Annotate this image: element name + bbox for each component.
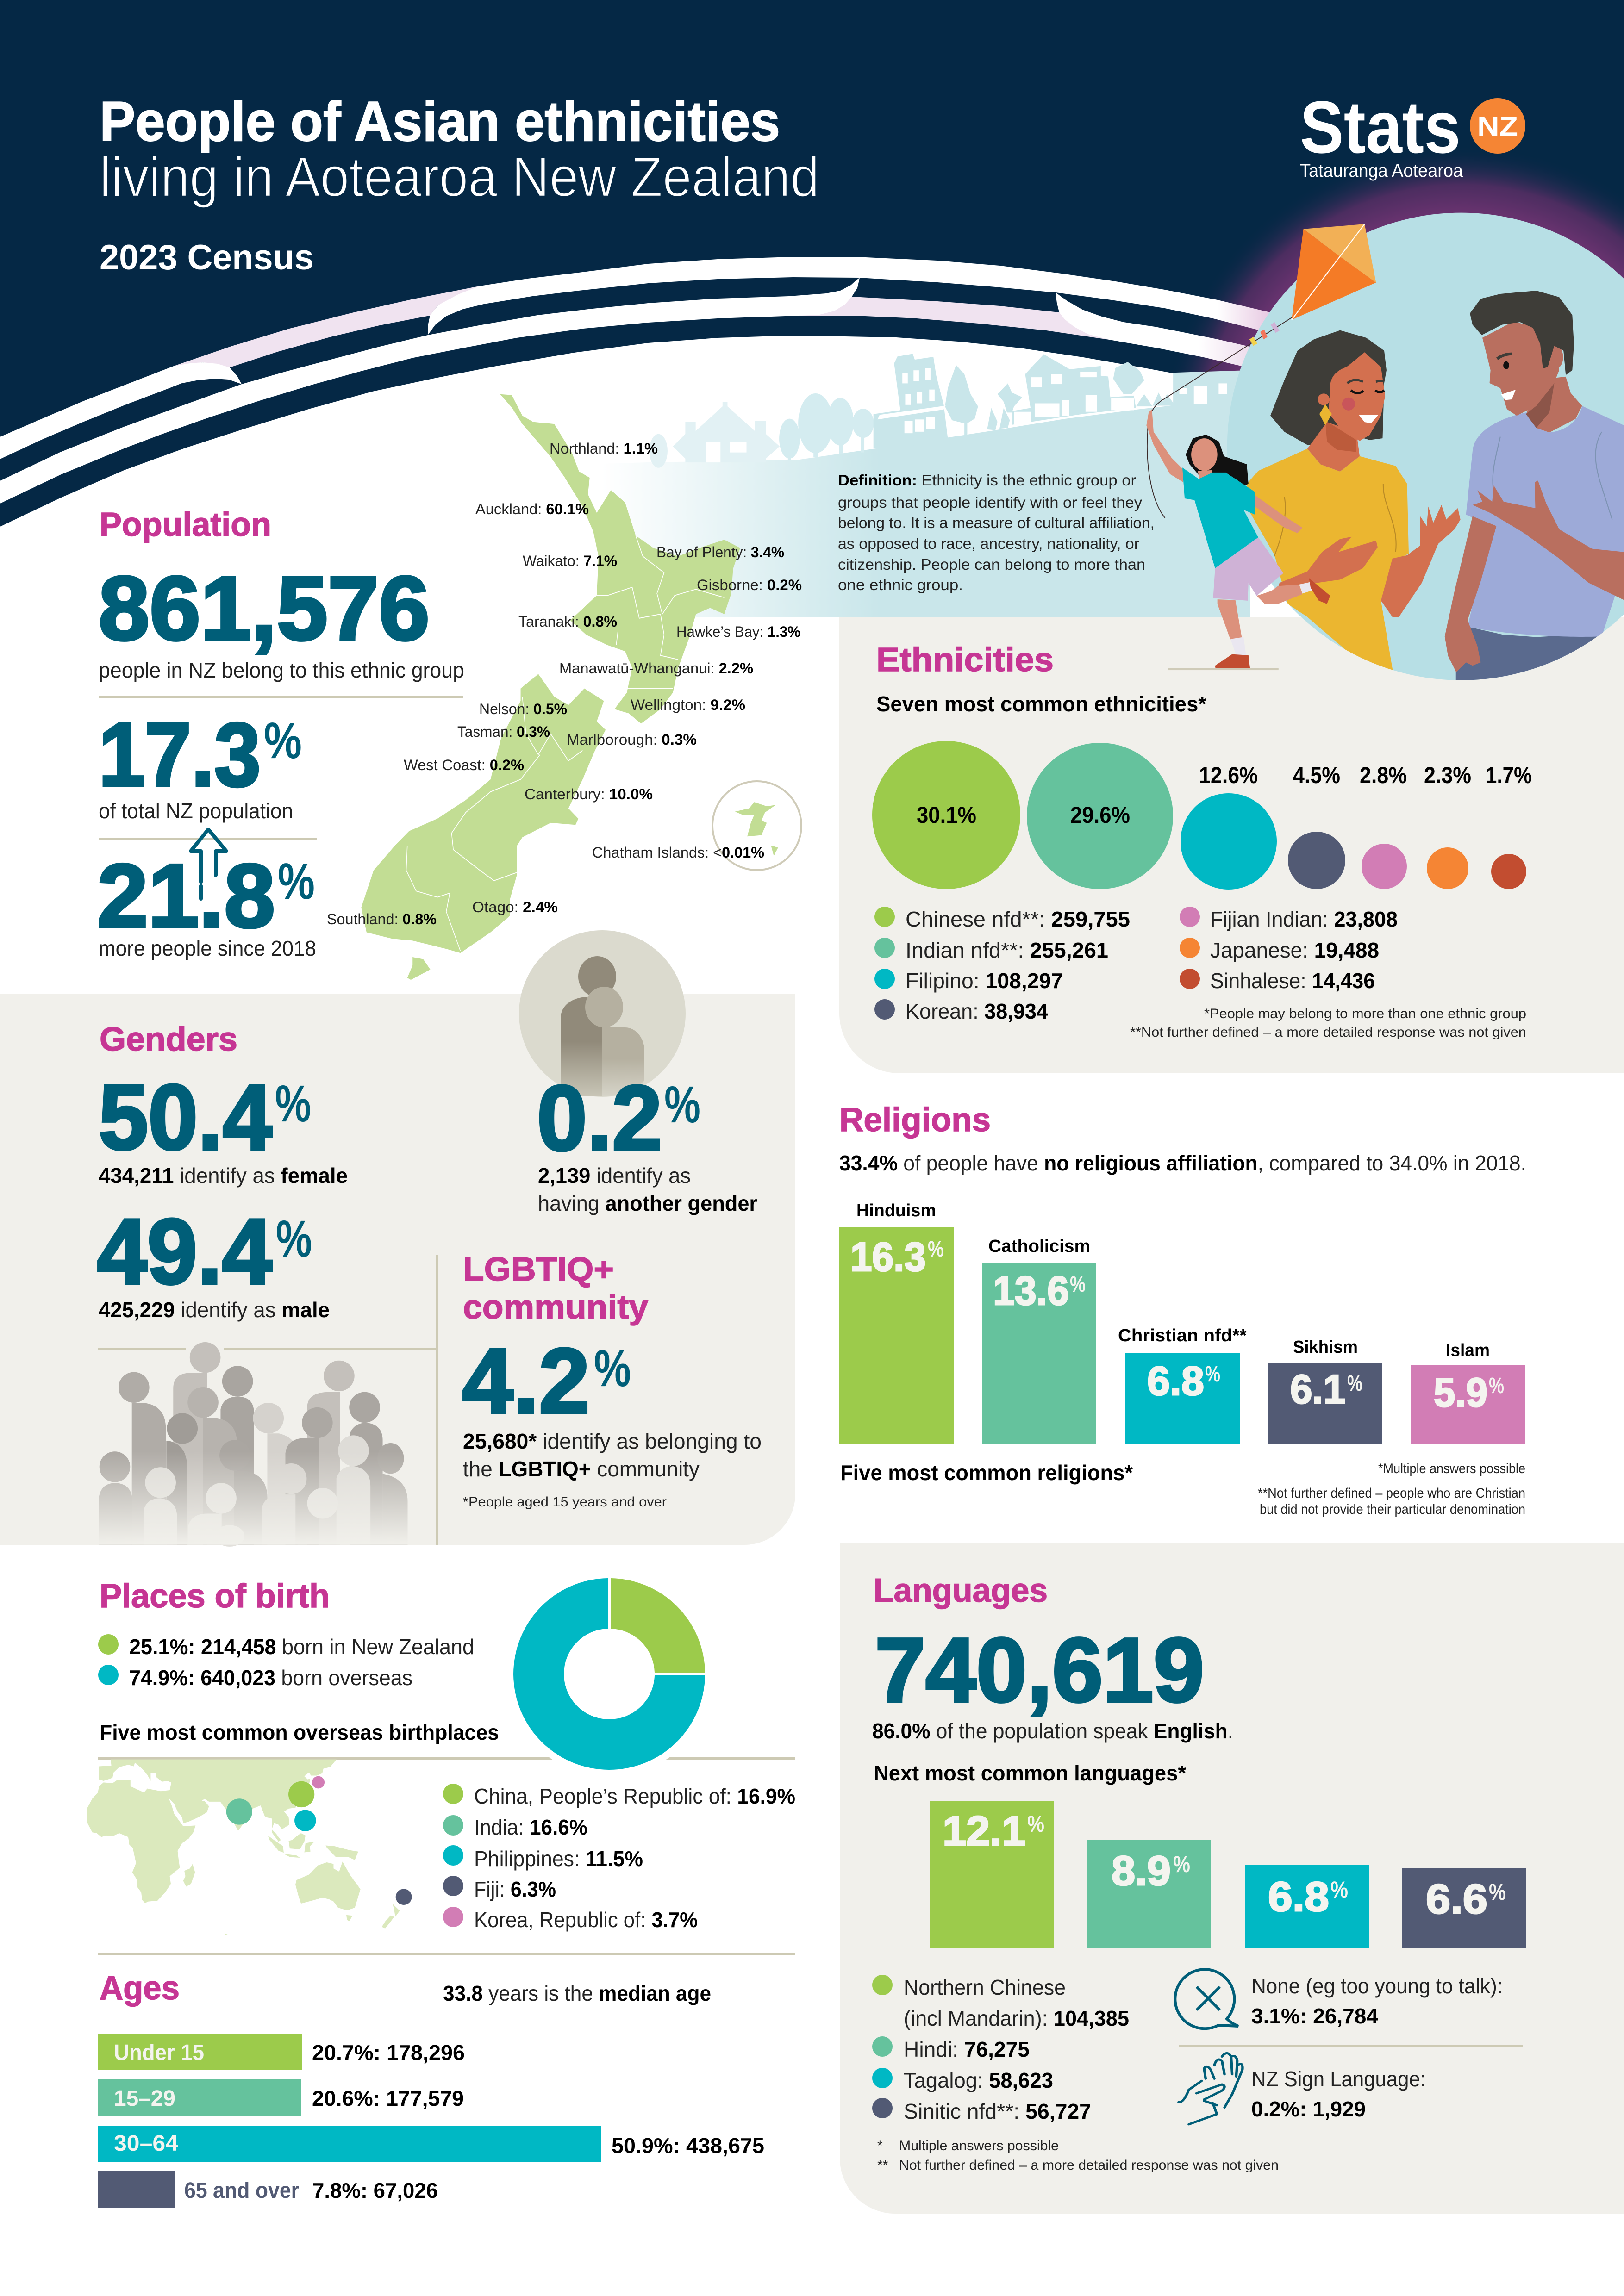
born in NZ vs overseas legend: 25.1%: 214,458 born in New Zealand <box>129 1635 474 1659</box>
bar: 15-29: 15–29 <box>114 2086 175 2111</box>
subheading: overseas birthplaces: Five most common overseas birthplaces <box>100 1720 499 1744</box>
bubble chart: 30.1% <box>917 802 976 828</box>
map of New Zealand with regional percentages: Bay of Plenty: 3.4% <box>656 544 784 560</box>
birthplaces legend: Fiji: 6.3% <box>474 1877 556 1901</box>
bar: hindi <box>1087 1840 1211 1948</box>
religions footnotes <box>1258 1461 1525 1517</box>
definition text: as opposed to race, ancestry, nationality, or <box>838 535 1139 552</box>
bar: christian nfd: % <box>1205 1362 1220 1387</box>
no religious affiliation text: 33.4% of people have no religious affiliation, compared to 34.0% in 2018. <box>839 1151 1526 1175</box>
bar: catholicism <box>982 1237 1096 1444</box>
map of New Zealand with regional percentages: Manawatū-Whanganui: 2.2% <box>559 660 753 677</box>
religions footnotes: *Multiple answers possible <box>1378 1461 1525 1476</box>
bar: christian nfd: 6.8 <box>1147 1358 1204 1404</box>
stat: 17.3%: % <box>264 712 302 769</box>
panel: ethnicities background <box>839 617 1624 1073</box>
no language text <box>1251 1974 1503 2028</box>
no language text: 3.1%: 26,784 <box>1251 2004 1378 2028</box>
stat: 49.4% male <box>97 1200 330 1322</box>
stat: 49.4% male: % <box>276 1210 312 1268</box>
heading: LGBTIQ+: LGBTIQ+ <box>463 1251 614 1288</box>
map of New Zealand with regional percentages: West Coast: 0.2% <box>404 757 524 773</box>
english speakers caption: 86.0% of the population speak English. <box>872 1719 1233 1743</box>
bubble chart: 29.6% <box>1070 802 1130 828</box>
ethnicities legend: Japanese: 19,488 <box>1210 938 1379 962</box>
median age: 33.8 years is the median age <box>443 1981 711 2005</box>
NZ sign language text: 0.2%: 1,929 <box>1251 2097 1366 2121</box>
bar: under 15 <box>98 2034 465 2070</box>
icon: two people in circle <box>519 930 686 1097</box>
Chatham Islands circle <box>712 781 801 870</box>
bar: sikhism: % <box>1347 1371 1362 1396</box>
bar: christian nfd <box>1118 1326 1247 1444</box>
ethnicities legend: Sinhalese: 14,436 <box>1210 969 1375 993</box>
definition text: groups that people identify with or feel they <box>838 494 1143 511</box>
stat: 50.4% female: 50.4 <box>99 1066 272 1169</box>
title: People of Asian ethnicities <box>100 90 780 153</box>
languages legend: (incl Mandarin): 104,385 <box>904 2006 1129 2030</box>
stat: 21.8%: % <box>278 853 315 910</box>
NZ sign language text: NZ Sign Language: <box>1251 2067 1426 2091</box>
bar: tagalog: 6.8 <box>1268 1874 1329 1920</box>
languages legend: Northern Chinese <box>904 1975 1066 1999</box>
panel: ages <box>98 1970 764 2208</box>
bar: tagalog <box>1245 1865 1369 1948</box>
bubble chart: 4.5% <box>1293 762 1340 788</box>
stat: 49.4% male: 425,229 identify as male <box>99 1298 330 1322</box>
ethnicities footnotes <box>1130 1006 1526 1040</box>
panel: LGBTIQ+ community <box>462 1251 762 1510</box>
bubble chart: 12.6% <box>1199 762 1258 788</box>
panel: population <box>97 506 464 960</box>
stat: 0.2% another gender: having another gender <box>538 1191 757 1215</box>
bar: islam: Islam <box>1446 1341 1490 1360</box>
bar: 15-29 <box>98 2079 464 2116</box>
icon: speech bubble with cross <box>1175 1969 1238 2028</box>
definition text: belong to. It is a measure of cultural affiliation, <box>838 514 1155 531</box>
stat: 4.2%: 4.2 <box>462 1330 590 1433</box>
bar: under 15: Under 15 <box>114 2041 204 2065</box>
heading: religions: Religions <box>839 1101 991 1139</box>
map of New Zealand with regional percentages: Tasman: 0.3% <box>457 723 550 740</box>
stat: 49.4% male: 49.4 <box>97 1200 272 1303</box>
caption: of total NZ population: of total NZ population <box>99 799 293 823</box>
NZ sign language text <box>1251 2067 1426 2121</box>
bubble chart: 1.7% <box>1486 762 1532 788</box>
stat: 4.2%: % <box>594 1339 631 1397</box>
bar: islam: 5.9 <box>1434 1369 1487 1415</box>
stat: 740,619: 740,619 <box>875 1619 1204 1721</box>
header background <box>0 0 1624 527</box>
bubble chart <box>872 741 1532 890</box>
map of New Zealand with regional percentages: Northland: 1.1% <box>550 440 658 457</box>
backdrop circle <box>1227 213 1624 680</box>
definition text <box>838 472 1155 593</box>
religions footnotes: but did not provide their particular denomination <box>1260 1502 1525 1517</box>
stat: 17.3%: 17.3 <box>99 704 261 805</box>
birthplaces legend: China, People’s Republic of: 16.9% <box>474 1784 795 1808</box>
logo: Stats NZ <box>1300 86 1525 181</box>
bar: northern chinese <box>930 1801 1054 1948</box>
birthplaces legend: Philippines: 11.5% <box>474 1847 643 1871</box>
bar: sikhism: 6.1 <box>1290 1366 1345 1412</box>
panel: languages <box>840 1543 1624 2214</box>
ethnicities legend: Indian nfd**: 255,261 <box>906 938 1108 962</box>
bar: catholicism: % <box>1070 1272 1086 1297</box>
stat: 50.4% female: % <box>275 1075 311 1132</box>
LGBTIQ+ caption: *People aged 15 years and over <box>463 1494 667 1510</box>
religions footnotes: **Not further defined – people who are Christian <box>1258 1486 1525 1501</box>
world map with birthplace markers <box>87 1760 412 1935</box>
bar: 15-29: 20.6%: 177,579 <box>312 2086 464 2110</box>
bar: hindi: % <box>1173 1851 1190 1877</box>
map of New Zealand with regional percentages: Otago: 2.4% <box>472 899 558 915</box>
map of New Zealand with regional percentages: Chatham Islands: <0.01% <box>592 844 764 861</box>
bar: sinitic: % <box>1489 1879 1506 1905</box>
heading: genders: Genders <box>100 1021 237 1058</box>
map of New Zealand with regional percentages: Southland: 0.8% <box>327 911 437 927</box>
title: living in Aotearoa New Zealand <box>100 145 819 208</box>
panel: religions <box>839 1101 1526 1517</box>
languages footnotes: Multiple answers possible <box>899 2138 1059 2153</box>
people crowd icon <box>96 1342 414 1547</box>
born in NZ vs overseas legend <box>98 1634 474 1690</box>
bar: christian nfd: Christian nfd** <box>1118 1326 1247 1345</box>
definition text: citizenship. People can belong to more than <box>838 556 1145 573</box>
map of New Zealand with regional percentages: Waikato: 7.1% <box>523 553 617 569</box>
heading: places of birth: Places of birth <box>100 1578 330 1615</box>
bar: 65 and over: 7.8%: 67,026 <box>312 2178 438 2203</box>
stat: 0.2% another gender: % <box>664 1076 700 1133</box>
panel: places of birth <box>87 1571 795 1955</box>
ethnicities legend: Fijian Indian: 23,808 <box>1210 907 1398 931</box>
bar: sinitic: 6.6 <box>1426 1876 1487 1923</box>
languages footnotes <box>877 2138 1279 2173</box>
bar: tagalog: % <box>1330 1877 1348 1903</box>
heading: ages: Ages <box>100 1970 180 2007</box>
languages legend: Hindi: 76,275 <box>904 2037 1030 2061</box>
stat: 0.2% another gender: 0.2 <box>537 1067 662 1170</box>
bar: northern chinese: % <box>1027 1811 1044 1837</box>
languages footnotes: * <box>877 2138 883 2153</box>
definition text: one ethnic group. <box>838 576 963 593</box>
bar: hinduism: Hinduism <box>856 1201 936 1220</box>
heading: population: Population <box>100 506 271 543</box>
subheading: seven most common: Seven most common ethnicities* <box>876 692 1206 716</box>
map of New Zealand with regional percentages: Canterbury: 10.0% <box>525 786 653 803</box>
bar: hinduism: 16.3 <box>850 1234 926 1280</box>
bar: 30-64: 30–64 <box>114 2131 178 2156</box>
bar: sikhism <box>1268 1338 1382 1444</box>
donut chart <box>506 1571 712 1777</box>
languages legend <box>872 1975 1129 2123</box>
heading: languages: Languages <box>874 1572 1048 1609</box>
stat: 861,576: 861,576 <box>99 558 430 659</box>
subheading: next most common languages: Next most common languages* <box>874 1761 1186 1785</box>
logo: Stats NZ: Stats <box>1300 86 1461 168</box>
bubble chart: 2.3% <box>1424 762 1471 788</box>
LGBTIQ+ caption <box>463 1429 762 1510</box>
ethnicities legend: Filipino: 108,297 <box>906 969 1063 993</box>
languages legend: Tagalog: 58,623 <box>904 2068 1053 2092</box>
bar: northern chinese: 12.1 <box>943 1808 1025 1854</box>
heading: community: community <box>463 1289 648 1326</box>
heading: ethnicities: Ethnicities <box>876 641 1054 678</box>
bubble chart: 2.8% <box>1360 762 1407 788</box>
bar: islam <box>1411 1341 1525 1444</box>
panel: ethnicities content <box>872 641 1532 1040</box>
definition text: Definition: Ethnicity is the ethnic group or <box>838 472 1136 489</box>
no language text: None (eg too young to talk): <box>1251 1974 1503 1998</box>
map of New Zealand with regional percentages: Gisborne: 0.2% <box>697 577 802 593</box>
bar: hinduism: % <box>928 1237 944 1262</box>
girl <box>1142 409 1330 670</box>
ethnicities footnotes: *People may belong to more than one ethnic group <box>1204 1006 1526 1021</box>
LGBTIQ+ caption: 25,680* identify as belonging to <box>463 1429 762 1453</box>
bar: 65 and over <box>98 2171 438 2208</box>
stat: 0.2% another gender <box>537 1067 757 1215</box>
map of New Zealand with regional percentages: Taranaki: 0.8% <box>518 613 617 630</box>
logo: Stats NZ: Tatauranga Aotearoa <box>1300 161 1463 181</box>
born in NZ vs overseas legend: 74.9%: 640,023 born overseas <box>129 1666 412 1690</box>
map of New Zealand with regional percentages: Wellington: 9.2% <box>631 697 745 713</box>
caption: people in NZ: people in NZ belong to this ethnic group <box>99 658 464 682</box>
map of New Zealand with regional percentages <box>327 394 802 980</box>
bar: 65 and over: 65 and over <box>184 2178 299 2203</box>
subtitle: 2023 Census: 2023 Census <box>100 238 314 277</box>
bar: catholicism: 13.6 <box>993 1268 1069 1313</box>
map of New Zealand with regional percentages: Hawke’s Bay: 1.3% <box>676 623 800 640</box>
bar: hinduism <box>839 1201 954 1444</box>
birthplaces legend: Korea, Republic of: 3.7% <box>474 1908 698 1932</box>
logo: Stats NZ: NZ <box>1477 112 1518 142</box>
ethnicities legend: Chinese nfd**: 259,755 <box>906 907 1130 931</box>
kite <box>1249 224 1376 346</box>
divider lines: genders panel <box>98 1255 438 1545</box>
bar: islam: % <box>1489 1374 1504 1398</box>
birthplaces legend: India: 16.6% <box>474 1815 587 1839</box>
bar: under 15: 20.7%: 178,296 <box>312 2041 465 2065</box>
stat: 50.4% female: 434,211 identify as female <box>99 1164 348 1188</box>
definition band <box>602 370 1250 617</box>
bar: 30-64: 50.9%: 438,675 <box>612 2134 764 2158</box>
ethnicities footnotes: **Not further defined – a more detailed response was not given <box>1130 1025 1526 1040</box>
bar: hindi: 8.9 <box>1112 1848 1171 1894</box>
bar: sikhism: Sikhism <box>1293 1338 1358 1357</box>
languages legend: Sinitic nfd**: 56,727 <box>904 2099 1091 2123</box>
man and woman <box>1247 291 1624 691</box>
icon: signing hands <box>1179 2053 1243 2124</box>
skyline silhouettes <box>650 354 1235 468</box>
ethnicities legend: Korean: 38,934 <box>906 999 1048 1023</box>
languages footnotes: ** <box>877 2158 888 2173</box>
bar: 30-64 <box>98 2126 764 2162</box>
languages footnotes: Not further defined – a more detailed response was not given <box>899 2158 1279 2173</box>
map of New Zealand with regional percentages: Auckland: 60.1% <box>475 501 589 517</box>
stat: 0.2% another gender: 2,139 identify as <box>538 1164 691 1188</box>
title <box>100 90 819 208</box>
birthplaces legend <box>443 1784 795 1932</box>
caption: more people since 2018: more people since 2018 <box>99 936 316 960</box>
icon: up arrow <box>191 829 226 899</box>
map of New Zealand with regional percentages: Marlborough: 0.3% <box>567 731 697 748</box>
illustration: family with kite <box>1142 213 1624 691</box>
bar: sinitic <box>1402 1868 1526 1948</box>
kite string <box>1147 317 1292 518</box>
LGBTIQ+ caption: the LGBTIQ+ community <box>463 1457 700 1481</box>
stat: 21.8%: 21.8 <box>97 846 275 946</box>
panel: genders background <box>0 994 795 1545</box>
map of New Zealand with regional percentages: Nelson: 0.5% <box>479 701 567 717</box>
ethnicities legend <box>874 907 1398 1023</box>
caption: five most common religions: Five most common religions* <box>840 1461 1133 1485</box>
decorative koru stripes <box>0 257 1270 504</box>
stat: 50.4% female <box>99 1066 348 1188</box>
bar: catholicism: Catholicism <box>988 1237 1090 1256</box>
